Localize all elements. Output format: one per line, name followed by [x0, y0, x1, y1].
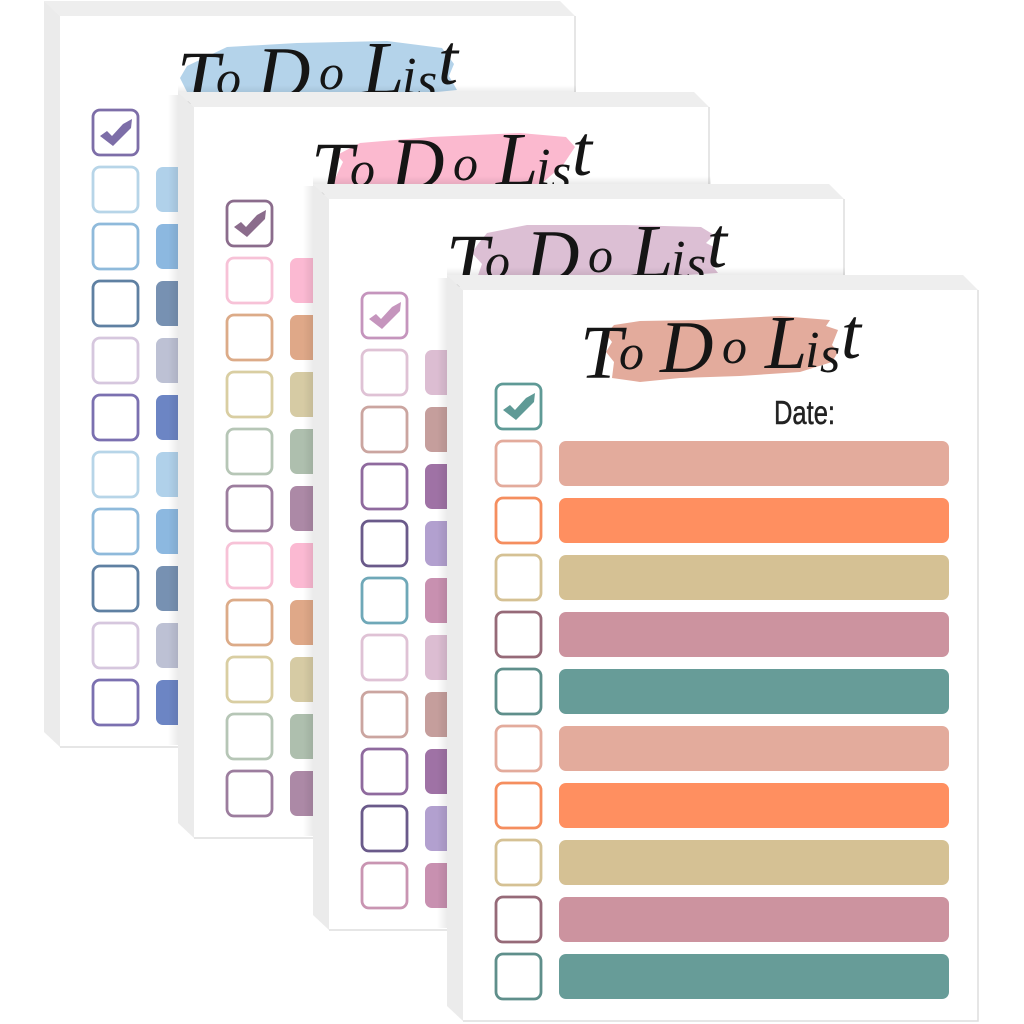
row 7: [362, 692, 815, 737]
title: blue notepad: T: [177, 37, 224, 121]
panel: pink notepad: [178, 92, 709, 838]
row 10: [227, 771, 680, 816]
row 4: [362, 521, 815, 566]
row 8: [93, 566, 546, 611]
title: blue notepad: o: [319, 44, 344, 100]
title: coral notepad: s: [820, 327, 840, 384]
title: pink notepad: t: [572, 111, 594, 191]
row 8: [362, 749, 815, 794]
title: blue notepad: [177, 20, 460, 121]
title: mauve notepad: t: [707, 203, 729, 283]
title: mauve notepad: o: [485, 233, 510, 289]
title: pink notepad: [311, 111, 594, 212]
title: pink notepad: i: [536, 139, 550, 196]
title: coral notepad: [580, 294, 863, 395]
row 9: [93, 623, 546, 668]
title: mauve notepad: o: [588, 227, 613, 283]
row 5: [93, 395, 546, 440]
row 3: [496, 555, 949, 600]
row 6: [362, 635, 815, 680]
title: coral notepad: o: [722, 318, 747, 374]
row 2: [227, 315, 680, 360]
title: mauve notepad: s: [686, 236, 706, 293]
title: mauve notepad: i: [671, 231, 685, 288]
row 2: [93, 224, 546, 269]
date label: Date:: [774, 394, 835, 431]
title: blue notepad: t: [438, 20, 460, 100]
panel: blue notepad: [44, 1, 575, 747]
row 1: [93, 167, 546, 212]
row 6: [227, 543, 680, 588]
row 2: [496, 498, 949, 543]
title: blue notepad: D: [256, 33, 310, 115]
icon: checked box: [362, 293, 407, 338]
row 8: [227, 657, 680, 702]
title: coral notepad: i: [805, 322, 819, 379]
row 5: [227, 486, 680, 531]
title: coral notepad: t: [841, 294, 863, 374]
row 7: [496, 783, 949, 828]
title: mauve notepad: [446, 203, 729, 304]
title: blue notepad: o: [216, 50, 241, 106]
title: pink notepad: D: [390, 124, 444, 206]
title: coral notepad: o: [619, 324, 644, 380]
row 6: [496, 726, 949, 771]
row 1: [227, 258, 680, 303]
title: pink notepad: T: [311, 128, 358, 212]
title: blue notepad: L: [361, 27, 404, 111]
title: pink notepad: s: [551, 144, 571, 201]
row 4: [496, 612, 949, 657]
row 2: [362, 407, 815, 452]
icon: checked box: [227, 201, 272, 246]
row 4: [227, 429, 680, 474]
row 1: [362, 350, 815, 395]
title: pink notepad: L: [495, 118, 538, 202]
row 9: [496, 897, 949, 942]
panel: coral notepad: [447, 275, 978, 1021]
panel: mauve notepad: [313, 184, 844, 930]
row 10: [496, 954, 949, 999]
row 3: [93, 281, 546, 326]
row 7: [227, 600, 680, 645]
row 6: [93, 452, 546, 497]
title: coral notepad: D: [659, 307, 713, 389]
row 3: [227, 372, 680, 417]
row 10: [93, 680, 546, 725]
title: blue notepad: i: [402, 48, 416, 105]
row 10: [362, 863, 815, 908]
row 9: [227, 714, 680, 759]
title: blue notepad: s: [417, 53, 437, 110]
row 5: [496, 669, 949, 714]
title: pink notepad: o: [350, 141, 375, 197]
title: mauve notepad: L: [630, 210, 673, 294]
row 8: [496, 840, 949, 885]
row 4: [93, 338, 546, 383]
row 7: [93, 509, 546, 554]
icon: checked box: [93, 110, 138, 155]
row 9: [362, 806, 815, 851]
title: mauve notepad: D: [525, 216, 579, 298]
title: coral notepad: L: [764, 301, 807, 385]
title: coral notepad: T: [580, 311, 627, 395]
row 1: [496, 441, 949, 486]
title: mauve notepad: T: [446, 220, 493, 304]
row 5: [362, 578, 815, 623]
title: pink notepad: o: [453, 135, 478, 191]
icon: checked box: [496, 384, 541, 429]
row 3: [362, 464, 815, 509]
